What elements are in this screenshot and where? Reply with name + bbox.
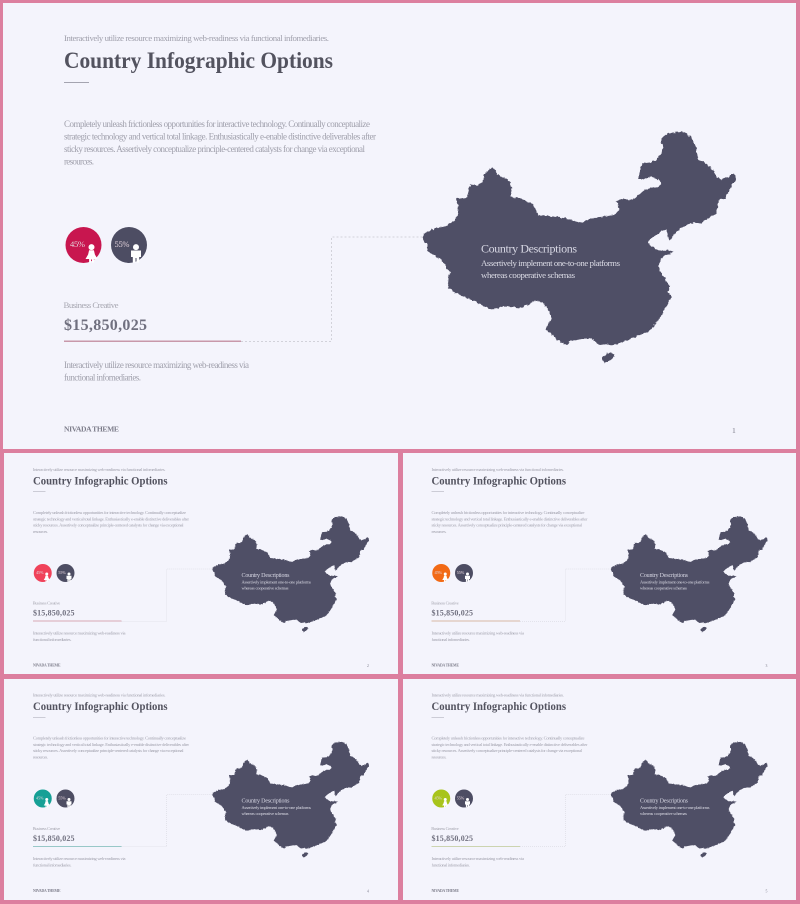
panel: slide variant red <box>4 453 398 674</box>
map: China <box>611 516 767 632</box>
map description <box>242 798 311 816</box>
icon: male 55% circle <box>455 564 473 582</box>
price: $15,850,025 <box>33 834 74 843</box>
map description: Assertively implement one-to-one platforms <box>242 805 311 810</box>
map description: Assertively implement one-to-one platforms <box>640 580 710 584</box>
description <box>33 856 126 867</box>
map description: Country Descriptions <box>242 573 290 579</box>
map description <box>242 573 311 590</box>
intro line: Interactively utilize resource maximizing web-readiness via functional infomediaries. <box>432 467 564 472</box>
body paragraph: Completely unleash frictionless opportunities for interactive technology. Continually conceptualize <box>432 736 585 740</box>
page number: 5 <box>766 890 768 894</box>
title: Country Infographic Options <box>432 701 566 713</box>
title: Country Infographic Options <box>432 476 566 488</box>
label: business creative: Business Creative <box>431 600 459 606</box>
icon: male 55% circle <box>455 790 473 808</box>
map description: whereas cooperative schemas <box>481 270 576 280</box>
map description: Country Descriptions <box>640 573 689 579</box>
map: China <box>212 516 369 632</box>
dashed connector <box>520 794 611 847</box>
map description: Country Descriptions <box>481 242 577 256</box>
map description: whereas cooperative schemas <box>640 811 687 816</box>
body paragraph: strategic technology and vertical total linkage. Enthusiastically e-enable distinctive deliverables after <box>33 516 189 521</box>
icon: female 45% circle: 45% <box>36 796 44 800</box>
icon: female 45% circle <box>34 790 52 808</box>
icon: female 45% circle: 45% <box>36 570 44 575</box>
icon: female 45% circle <box>34 564 52 582</box>
body paragraph <box>432 736 588 759</box>
description: Interactively utilize resource maximizing web-readiness via <box>432 630 524 636</box>
body paragraph: resources. <box>33 529 48 534</box>
map description: Assertively implement one-to-one platforms <box>481 258 621 268</box>
map description <box>481 242 621 280</box>
accent underline <box>64 340 241 342</box>
icon: female 45% circle <box>66 227 102 263</box>
icon: female 45% circle <box>432 790 450 808</box>
body paragraph: Completely unleash frictionless opportunities for interactive technology. Continually conceptualize <box>33 736 186 740</box>
page number: 2 <box>367 664 369 668</box>
icon: male 55% circle <box>56 564 74 582</box>
dashed connector <box>122 794 212 847</box>
body paragraph: resources. <box>432 754 446 759</box>
icon: male 55% circle: 55% <box>457 796 465 800</box>
title rule <box>33 490 46 493</box>
panel: main slide <box>3 3 796 449</box>
map description: Country Descriptions <box>640 798 689 804</box>
price: $15,850,025 <box>64 317 147 334</box>
map description: whereas cooperative schemas <box>242 811 289 816</box>
intro line: Interactively utilize resource maximizing web-readiness via functional infomediaries. <box>33 692 166 698</box>
panel: slide variant orange <box>403 453 796 674</box>
dashed connector <box>122 569 212 621</box>
map description <box>640 573 710 590</box>
title: Country Infographic Options <box>64 48 333 73</box>
body paragraph: sticky resources. Assertively conceptualize principle-centered catalysts for change via exceptional <box>64 144 365 154</box>
intro line: Interactively utilize resource maximizing web-readiness via functional infomediaries. <box>64 33 329 43</box>
icon: male 55% circle: 55% <box>58 570 66 575</box>
icon: female 45% circle: 45% <box>434 796 442 800</box>
description <box>33 630 126 642</box>
icon: female 45% circle <box>432 564 450 582</box>
accent underline <box>33 620 122 622</box>
title rule <box>33 716 46 718</box>
title rule <box>432 490 444 493</box>
map description: Assertively implement one-to-one platforms <box>242 580 311 584</box>
description: functional infomediaries. <box>432 862 470 867</box>
description: Interactively utilize resource maximizing web-readiness via <box>33 856 126 861</box>
body paragraph: resources. <box>33 754 48 759</box>
label: business creative: Business Creative <box>33 600 60 606</box>
map: China <box>423 132 736 363</box>
intro line: Interactively utilize resource maximizing web-readiness via functional infomediaries. <box>432 692 564 698</box>
icon: male 55% circle: 55% <box>457 570 465 575</box>
icon: female 45% circle: 45% <box>70 239 85 249</box>
body paragraph: resources. <box>64 156 94 166</box>
icon: female 45% circle: 45% <box>434 570 442 575</box>
body paragraph: Completely unleash frictionless opportunities for interactive technology. Continually conceptualize <box>33 510 186 515</box>
page number: 3 <box>766 664 768 668</box>
map: China <box>611 742 767 857</box>
title: Country Infographic Options <box>33 701 168 713</box>
page number: 1 <box>732 426 736 435</box>
footer brand: NIVADA THEME <box>64 424 119 434</box>
icon: male 55% circle: 55% <box>58 796 66 800</box>
body paragraph <box>432 510 588 534</box>
description: functional infomediaries. <box>64 372 141 382</box>
accent underline <box>33 846 122 847</box>
body paragraph: sticky resources. Assertively conceptualize principle-centered catalysts for change via exceptional <box>33 748 184 753</box>
map description: whereas cooperative schemas <box>640 586 687 590</box>
title: Country Infographic Options <box>33 476 168 488</box>
body paragraph <box>33 736 189 759</box>
intro line: Interactively utilize resource maximizing web-readiness via functional infomediaries. <box>33 467 166 472</box>
icon: male 55% circle <box>111 227 147 263</box>
dashed connector <box>520 569 611 621</box>
panel: slide variant teal <box>4 679 398 900</box>
label: business creative: Business Creative <box>64 300 119 310</box>
body paragraph <box>64 119 376 166</box>
icon: male 55% circle <box>56 790 74 808</box>
label: business creative: Business Creative <box>33 826 60 831</box>
dashed connector <box>241 237 423 342</box>
body paragraph: Completely unleash frictionless opportunities for interactive technology. Continually conceptualize <box>64 119 370 129</box>
description: Interactively utilize resource maximizing web-readiness via <box>33 630 126 636</box>
description: functional infomediaries. <box>33 637 72 642</box>
description <box>64 360 249 382</box>
label: business creative: Business Creative <box>431 826 459 831</box>
map description: Country Descriptions <box>242 798 290 804</box>
footer brand: NIVADA THEME <box>432 663 459 667</box>
title rule <box>64 82 89 83</box>
price: $15,850,025 <box>432 608 473 618</box>
accent underline <box>432 846 520 847</box>
footer brand: NIVADA THEME <box>33 889 61 893</box>
description: Interactively utilize resource maximizing web-readiness via <box>432 856 524 861</box>
map description: whereas cooperative schemas <box>242 586 289 590</box>
body paragraph: resources. <box>432 529 446 534</box>
body paragraph: sticky resources. Assertively conceptualize principle-centered catalysts for change via exceptional <box>432 748 583 753</box>
body paragraph: strategic technology and vertical total linkage. Enthusiastically e-enable distinctive deliverables after <box>432 516 588 521</box>
description: functional infomediaries. <box>432 637 470 642</box>
body paragraph: strategic technology and vertical total linkage. Enthusiastically e-enable distinctive deliverables after <box>33 742 189 747</box>
footer brand: NIVADA THEME <box>33 663 61 667</box>
map description <box>640 798 710 816</box>
accent underline <box>432 620 520 622</box>
body paragraph <box>33 510 189 534</box>
price: $15,850,025 <box>432 834 473 843</box>
footer brand: NIVADA THEME <box>432 889 459 893</box>
map description: Assertively implement one-to-one platforms <box>640 805 710 810</box>
description: functional infomediaries. <box>33 862 72 867</box>
body paragraph: strategic technology and vertical total linkage. Enthusiastically e-enable distinctive deliverables after <box>64 132 376 142</box>
body paragraph: Completely unleash frictionless opportunities for interactive technology. Continually conceptualize <box>432 510 585 515</box>
body paragraph: sticky resources. Assertively conceptualize principle-centered catalysts for change via exceptional <box>33 522 184 528</box>
description <box>432 856 524 867</box>
panel: slide variant green <box>403 679 796 900</box>
title rule <box>432 716 444 718</box>
body paragraph: sticky resources. Assertively conceptualize principle-centered catalysts for change via exceptional <box>432 522 583 528</box>
map: China <box>212 742 369 857</box>
page number: 4 <box>367 890 369 894</box>
description: Interactively utilize resource maximizing web-readiness via <box>64 360 249 370</box>
body paragraph: strategic technology and vertical total linkage. Enthusiastically e-enable distinctive deliverables after <box>432 742 588 747</box>
description <box>432 630 524 642</box>
price: $15,850,025 <box>33 608 74 618</box>
icon: male 55% circle: 55% <box>114 239 130 249</box>
